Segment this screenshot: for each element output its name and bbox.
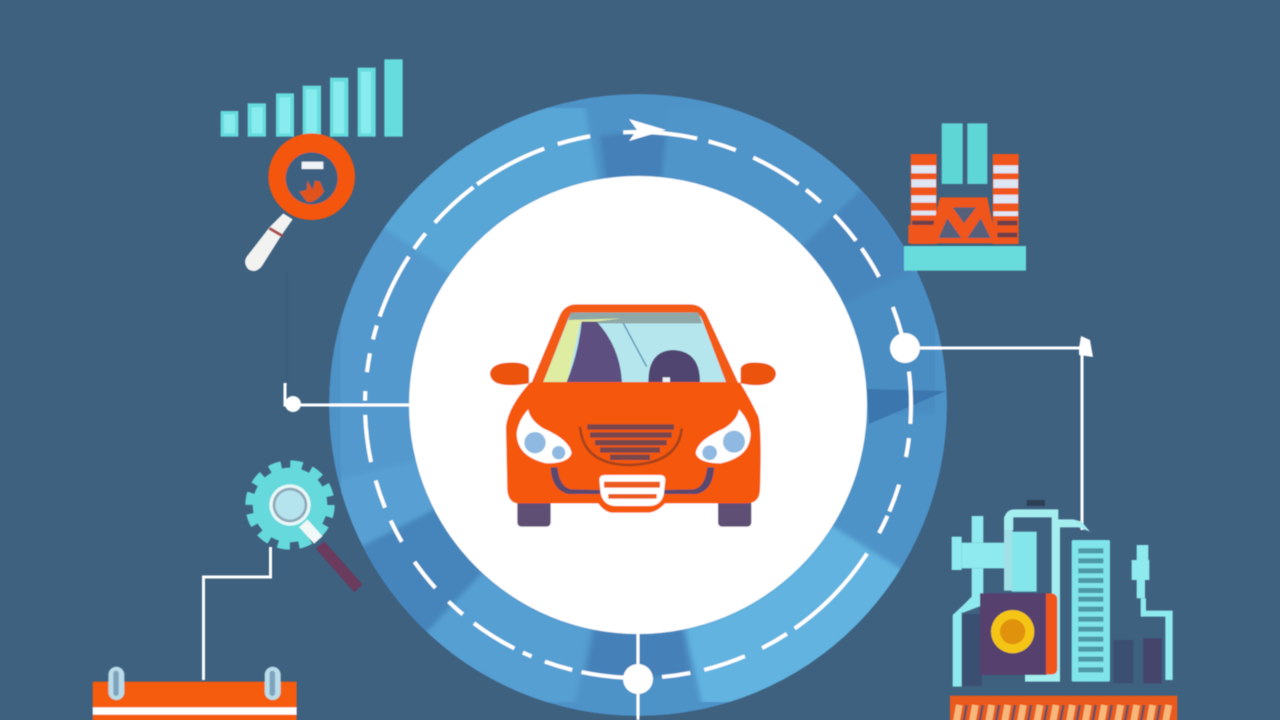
engine icon	[950, 500, 1177, 720]
car: upper grille	[580, 424, 682, 465]
calendar icon	[93, 667, 297, 720]
gear: cog	[250, 465, 330, 545]
car: roof and windshield frame	[530, 304, 740, 387]
cycle ring	[329, 94, 947, 716]
engine: cylinder and pipe	[1004, 509, 1090, 682]
engine: left pipe assembly	[952, 516, 1005, 687]
car illustration	[490, 304, 776, 527]
engine: right valve and pipe	[1132, 545, 1173, 680]
infographic canvas	[92, 58, 1178, 720]
car: side mirrors	[490, 363, 776, 385]
car: wheels	[517, 500, 751, 527]
bar chart icon	[221, 59, 403, 137]
engine: dark background shapes	[962, 500, 1162, 686]
car: body	[506, 383, 761, 513]
engine: orange platform	[950, 696, 1177, 720]
factory machine icon	[904, 123, 1026, 271]
factory: orange truss	[908, 197, 997, 243]
direction arrow	[629, 119, 666, 141]
white centre circle	[409, 176, 867, 634]
magnifying glass icon	[245, 133, 355, 271]
factory: striped columns	[911, 154, 1019, 244]
car: left headlight	[517, 409, 572, 463]
car: windshield	[543, 313, 726, 382]
car: right headlight	[696, 409, 751, 463]
car: lower grille	[599, 475, 665, 506]
engine: radiator	[1072, 540, 1110, 682]
factory: base slab	[904, 246, 1026, 271]
connector: left node	[285, 272, 409, 412]
car: bumper trim	[551, 467, 714, 494]
engine: block with pulley	[980, 593, 1057, 675]
factory: teal towers	[942, 123, 987, 184]
connector: gear to calendar	[204, 547, 270, 680]
gear: magnifier lens	[269, 484, 318, 540]
connector: bottom node	[623, 634, 653, 720]
gear: magnifier handle	[320, 545, 358, 588]
dashed road path	[365, 132, 911, 678]
connector: right node to engine	[890, 333, 1093, 530]
gear inspection icon	[250, 465, 358, 588]
